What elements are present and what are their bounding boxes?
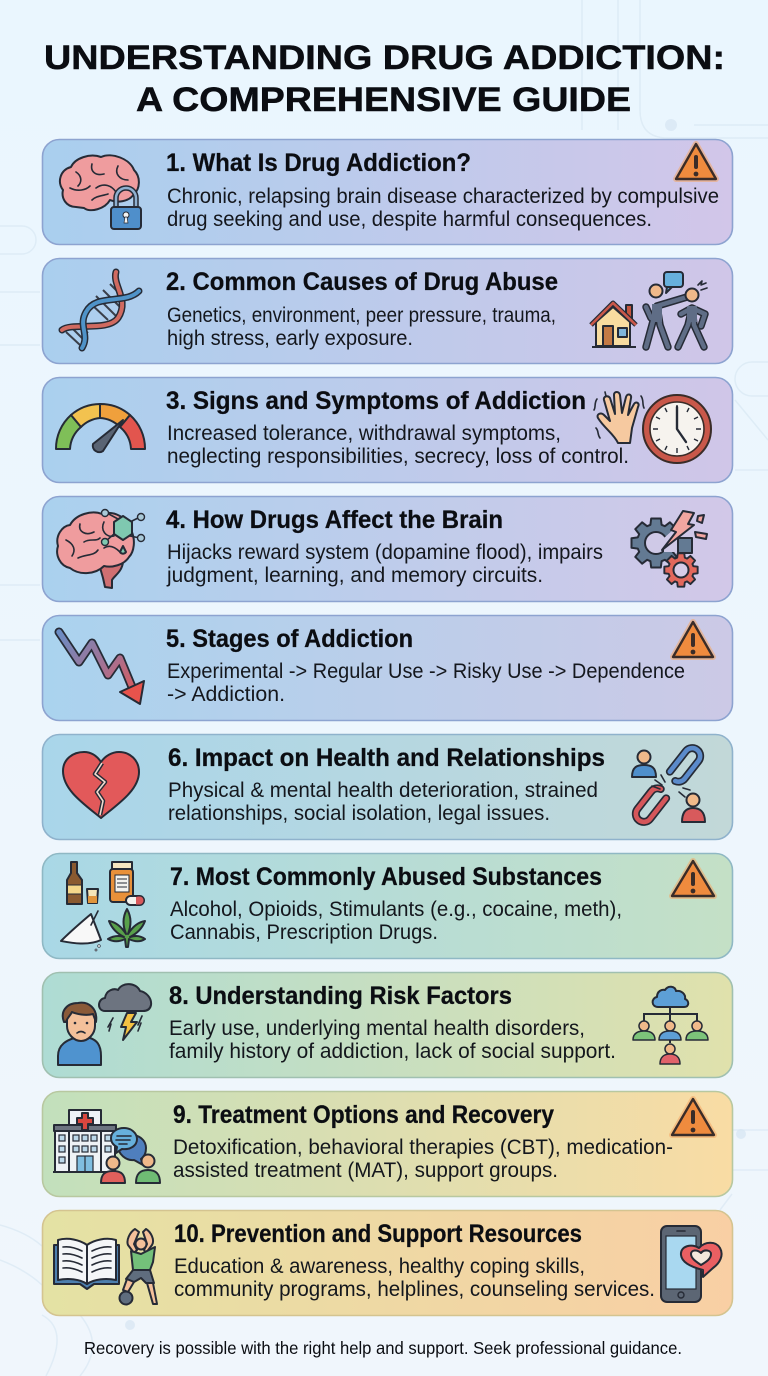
footer note: Recovery is possible with the right help and support. Seek professional guidance.: [84, 1338, 682, 1358]
icon: open book: [54, 1239, 119, 1289]
panel: what is drug addiction: [42, 140, 732, 244]
text block: Increased tolerance, withdrawal symptoms,: [167, 421, 561, 445]
panel: signs and symptoms: [42, 378, 732, 482]
heading: 3. Signs and Symptoms of Addiction: [166, 387, 586, 415]
text block: drug seeking and use, despite harmful consequences.: [167, 207, 652, 231]
text block: Early use, underlying mental health disorders,: [169, 1016, 585, 1040]
heading: 4. How Drugs Affect the Brain: [166, 506, 503, 534]
text block: [170, 897, 622, 944]
icon: broken gears: [632, 511, 707, 587]
icon: arguing people: [646, 272, 707, 347]
icon: brain with molecule: [57, 510, 144, 588]
icon: warning triangle: [672, 861, 714, 896]
text block: Chronic, relapsing brain disease characterized by compulsive: [167, 184, 719, 208]
panel: impact on health and relationships: [42, 734, 732, 840]
icon: gauge: [56, 404, 145, 452]
title: A COMPREHENSIVE GUIDE: [136, 81, 631, 119]
heading: 1. What Is Drug Addiction?: [166, 149, 471, 177]
icon: substances: [61, 862, 145, 951]
text block: [169, 1016, 616, 1063]
text block: Experimental -> Regular Use -> Risky Use -> Dependence: [167, 659, 685, 683]
icon: hospital and counselling: [53, 1110, 160, 1183]
title: [44, 39, 725, 119]
icon: shaking hand: [594, 392, 644, 443]
text block: Alcohol, Opioids, Stimulants (e.g., cocaine, meth),: [170, 897, 622, 921]
text block: [167, 421, 629, 468]
text block: Education & awareness, healthy coping skills,: [174, 1254, 585, 1278]
icon: warning triangle: [676, 144, 716, 179]
panel: treatment options and recovery: [42, 1092, 732, 1196]
heading: 10. Prevention and Support Resources: [174, 1220, 582, 1248]
icon: family tree: [633, 987, 708, 1064]
text block: relationships, social isolation, legal issues.: [168, 801, 550, 825]
text block: neglecting responsibilities, secrecy, loss of control.: [167, 444, 629, 468]
text block: judgment, learning, and memory circuits.: [166, 563, 543, 587]
icon: exercising person: [120, 1229, 157, 1304]
text block: community programs, helplines, counseling services.: [174, 1277, 655, 1301]
heading: 5. Stages of Addiction: [166, 625, 413, 653]
text block: Detoxification, behavioral therapies (CBT), medication-: [173, 1135, 673, 1159]
text block: [167, 303, 556, 350]
text block: Cannabis, Prescription Drugs.: [170, 920, 438, 944]
icon: DNA helix: [62, 272, 139, 348]
text block: family history of addiction, lack of social support.: [169, 1039, 616, 1063]
icon: brain with padlock: [60, 155, 141, 229]
text block: [166, 540, 603, 587]
heading: 2. Common Causes of Drug Abuse: [166, 268, 558, 296]
panel: understanding risk factors: [42, 972, 732, 1078]
heading: 6. Impact on Health and Relationships: [168, 744, 605, 772]
text block: Physical & mental health deterioration, strained: [168, 778, 598, 802]
icon: broken chain with people: [632, 745, 705, 825]
heading: 8. Understanding Risk Factors: [169, 982, 512, 1010]
panel: common causes: [42, 258, 732, 364]
text block: Hijacks reward system (dopamine flood), impairs: [167, 540, 603, 564]
text block: -> Addiction.: [167, 682, 285, 706]
icon: warning triangle: [673, 622, 713, 657]
icon: worried person under storm cloud: [58, 984, 151, 1065]
text block: assisted treatment (MAT), support groups.: [173, 1158, 558, 1182]
heading: 9. Treatment Options and Recovery: [173, 1101, 554, 1129]
text block: [167, 659, 685, 706]
icon: broken heart: [63, 752, 139, 818]
panel: most commonly abused substances: [42, 854, 732, 958]
text block: [173, 1135, 673, 1182]
text block: Genetics, environment, peer pressure, trauma,: [167, 303, 556, 327]
panel: prevention and support resources: [42, 1210, 732, 1316]
icon: clock: [643, 395, 711, 463]
panel: stages of addiction: [42, 616, 732, 720]
icon: warning triangle: [672, 1099, 714, 1135]
icon: falling zigzag arrow: [59, 632, 144, 704]
text block: [167, 184, 719, 231]
heading: 7. Most Commonly Abused Substances: [170, 863, 602, 891]
text block: [174, 1254, 655, 1301]
icon: house: [591, 303, 636, 347]
text block: high stress, early exposure.: [167, 326, 413, 350]
text block: [168, 778, 598, 825]
panel: how drugs affect the brain: [42, 496, 732, 602]
title: UNDERSTANDING DRUG ADDICTION:: [44, 39, 725, 77]
icon: phone with heart message: [661, 1226, 722, 1302]
